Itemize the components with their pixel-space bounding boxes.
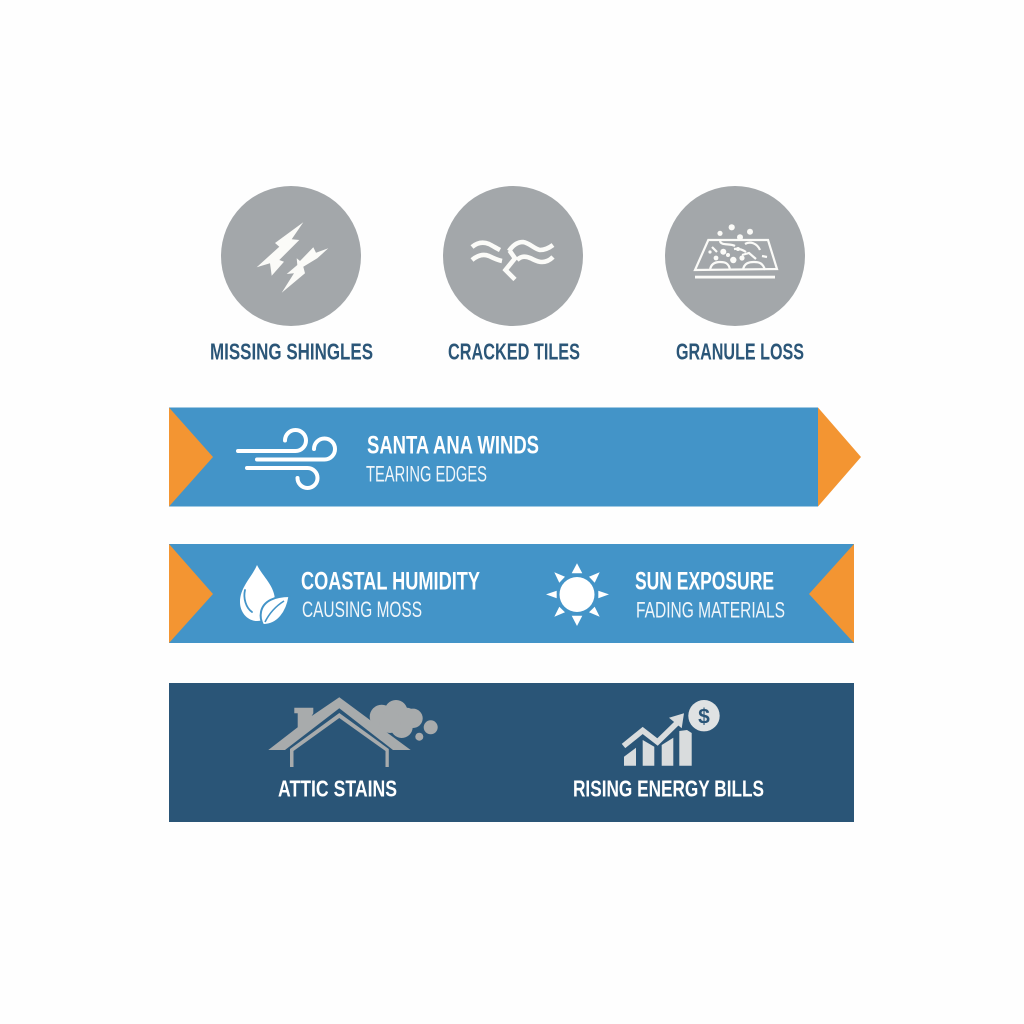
heading: santa ana winds: SANTA ANA WINDS <box>367 432 539 460</box>
banner: santa ana winds <box>169 408 861 506</box>
icon: cracked waves <box>472 242 553 280</box>
panel: attic stains and energy bills <box>169 683 854 822</box>
subtext: causing moss: CAUSING MOSS <box>302 597 422 622</box>
panel: cracked tiles <box>443 186 583 364</box>
subtext: fading materials: FADING MATERIALS <box>636 598 785 622</box>
heading: sun exposure: SUN EXPOSURE <box>635 568 774 596</box>
label: attic stains: ATTIC STAINS <box>278 776 397 802</box>
right orange notch <box>809 544 854 643</box>
icon: sun <box>546 563 609 626</box>
label: rising energy bills: RISING ENERGY BILLS <box>573 776 764 802</box>
icon circle: granule loss <box>665 186 805 326</box>
subtext: tearing edges: TEARING EDGES <box>366 462 487 486</box>
right orange arrow <box>818 408 861 506</box>
heading: coastal humidity: COASTAL HUMIDITY <box>301 568 480 596</box>
label: missing shingles: MISSING SHINGLES <box>210 338 373 364</box>
icon: lightning bolts <box>257 222 328 293</box>
panel body <box>169 683 854 822</box>
icon: house with cloud <box>268 697 438 767</box>
icon circle: cracked tiles <box>443 186 583 326</box>
banner body <box>169 544 854 643</box>
icon circle: missing shingles <box>221 186 361 326</box>
icon: worn shingle with granules <box>695 224 777 278</box>
icon: rising chart with dollar: $ <box>698 706 710 728</box>
icon: water drop and leaf <box>240 565 290 625</box>
panel: granule loss <box>665 186 805 364</box>
label: cracked tiles: CRACKED TILES <box>448 338 580 364</box>
icon: wind <box>238 430 335 488</box>
left orange notch <box>169 544 213 643</box>
banner: humidity and sun <box>169 544 854 643</box>
icon: rising chart with dollar <box>624 700 720 766</box>
label: granule loss: GRANULE LOSS <box>676 338 804 364</box>
panel: missing shingles <box>210 186 373 364</box>
left orange notch <box>169 408 213 506</box>
banner body <box>169 408 818 506</box>
